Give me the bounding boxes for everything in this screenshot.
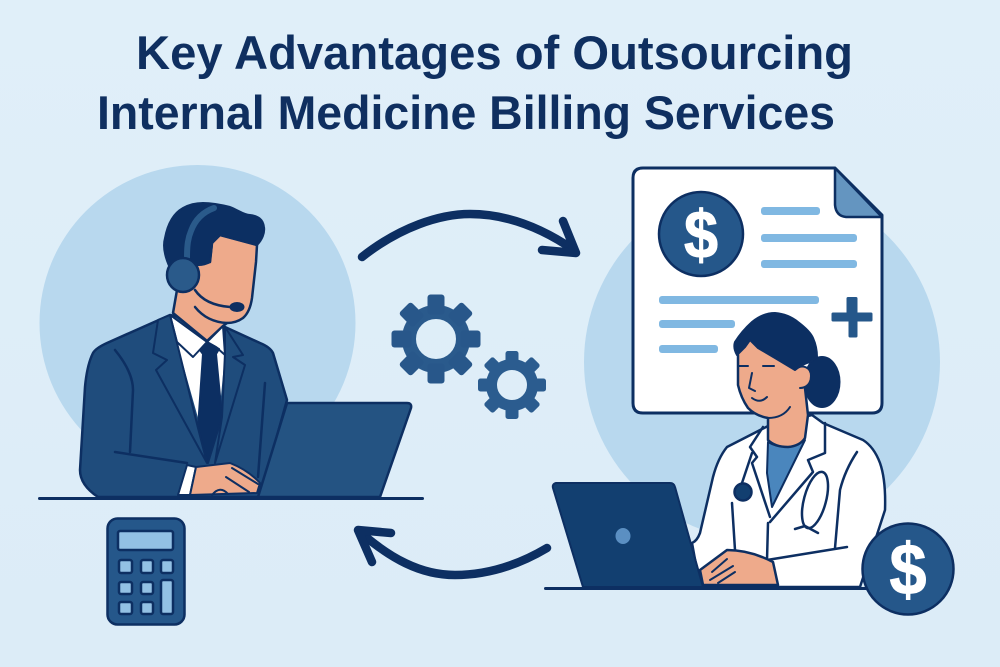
icon: dollar badge, lower right: [862, 524, 954, 614]
icon: dollar badge, lower right: $: [890, 530, 926, 610]
title: [97, 27, 853, 140]
lab coat: [692, 415, 885, 587]
background circle: right: [584, 184, 940, 540]
title: Internal Medicine Billing Services: [97, 87, 835, 140]
fingers: [710, 559, 735, 583]
coat lapels and seams: [732, 423, 857, 560]
background circle: left: [40, 165, 356, 481]
icon: medical plus: [832, 297, 872, 338]
desk: right: [544, 587, 869, 590]
neck and face: [173, 235, 257, 341]
document page: [633, 168, 882, 413]
shirt collar: [170, 315, 225, 357]
blue scrub shirt: [767, 440, 805, 507]
icon: dollar badge: [659, 192, 743, 276]
arrow: bottom, right to left: [358, 530, 547, 575]
man with headset at laptop: [80, 203, 287, 497]
icon: large gear: [392, 294, 480, 384]
jacket lapels: [153, 315, 245, 463]
suit jacket: [80, 315, 287, 497]
folded corner: [835, 168, 882, 217]
icon: small gear: [478, 351, 546, 419]
hair: [164, 203, 264, 272]
hand: [190, 463, 260, 495]
necktie: [198, 342, 222, 463]
headset band: [187, 208, 214, 258]
desk: left: [38, 497, 424, 500]
neck and face: [738, 338, 808, 447]
billing document: [633, 168, 882, 413]
document text lines: [659, 207, 857, 353]
doctor at laptop: [692, 313, 885, 587]
arrow: top, left to right: [362, 214, 576, 257]
facial features: [738, 366, 790, 418]
stethoscope: [734, 453, 833, 533]
icon: calculator: [108, 518, 184, 624]
shirt cuff: [178, 465, 196, 495]
face and neck outline: [738, 355, 808, 447]
jacket seam lines: [115, 350, 265, 477]
laptop: man: [258, 403, 411, 497]
ear: [796, 367, 811, 388]
hand: [700, 550, 778, 585]
title: Key Advantages of Outsourcing: [136, 27, 853, 80]
headset ear cup: [167, 258, 199, 292]
icon: dollar badge: $: [684, 197, 718, 273]
fingers: [212, 468, 258, 495]
hair: [734, 313, 817, 370]
shirt: [172, 320, 225, 425]
smile line: [195, 307, 227, 323]
hair bun: [804, 357, 840, 407]
headset microphone: [195, 290, 244, 312]
laptop: doctor: [553, 483, 703, 587]
